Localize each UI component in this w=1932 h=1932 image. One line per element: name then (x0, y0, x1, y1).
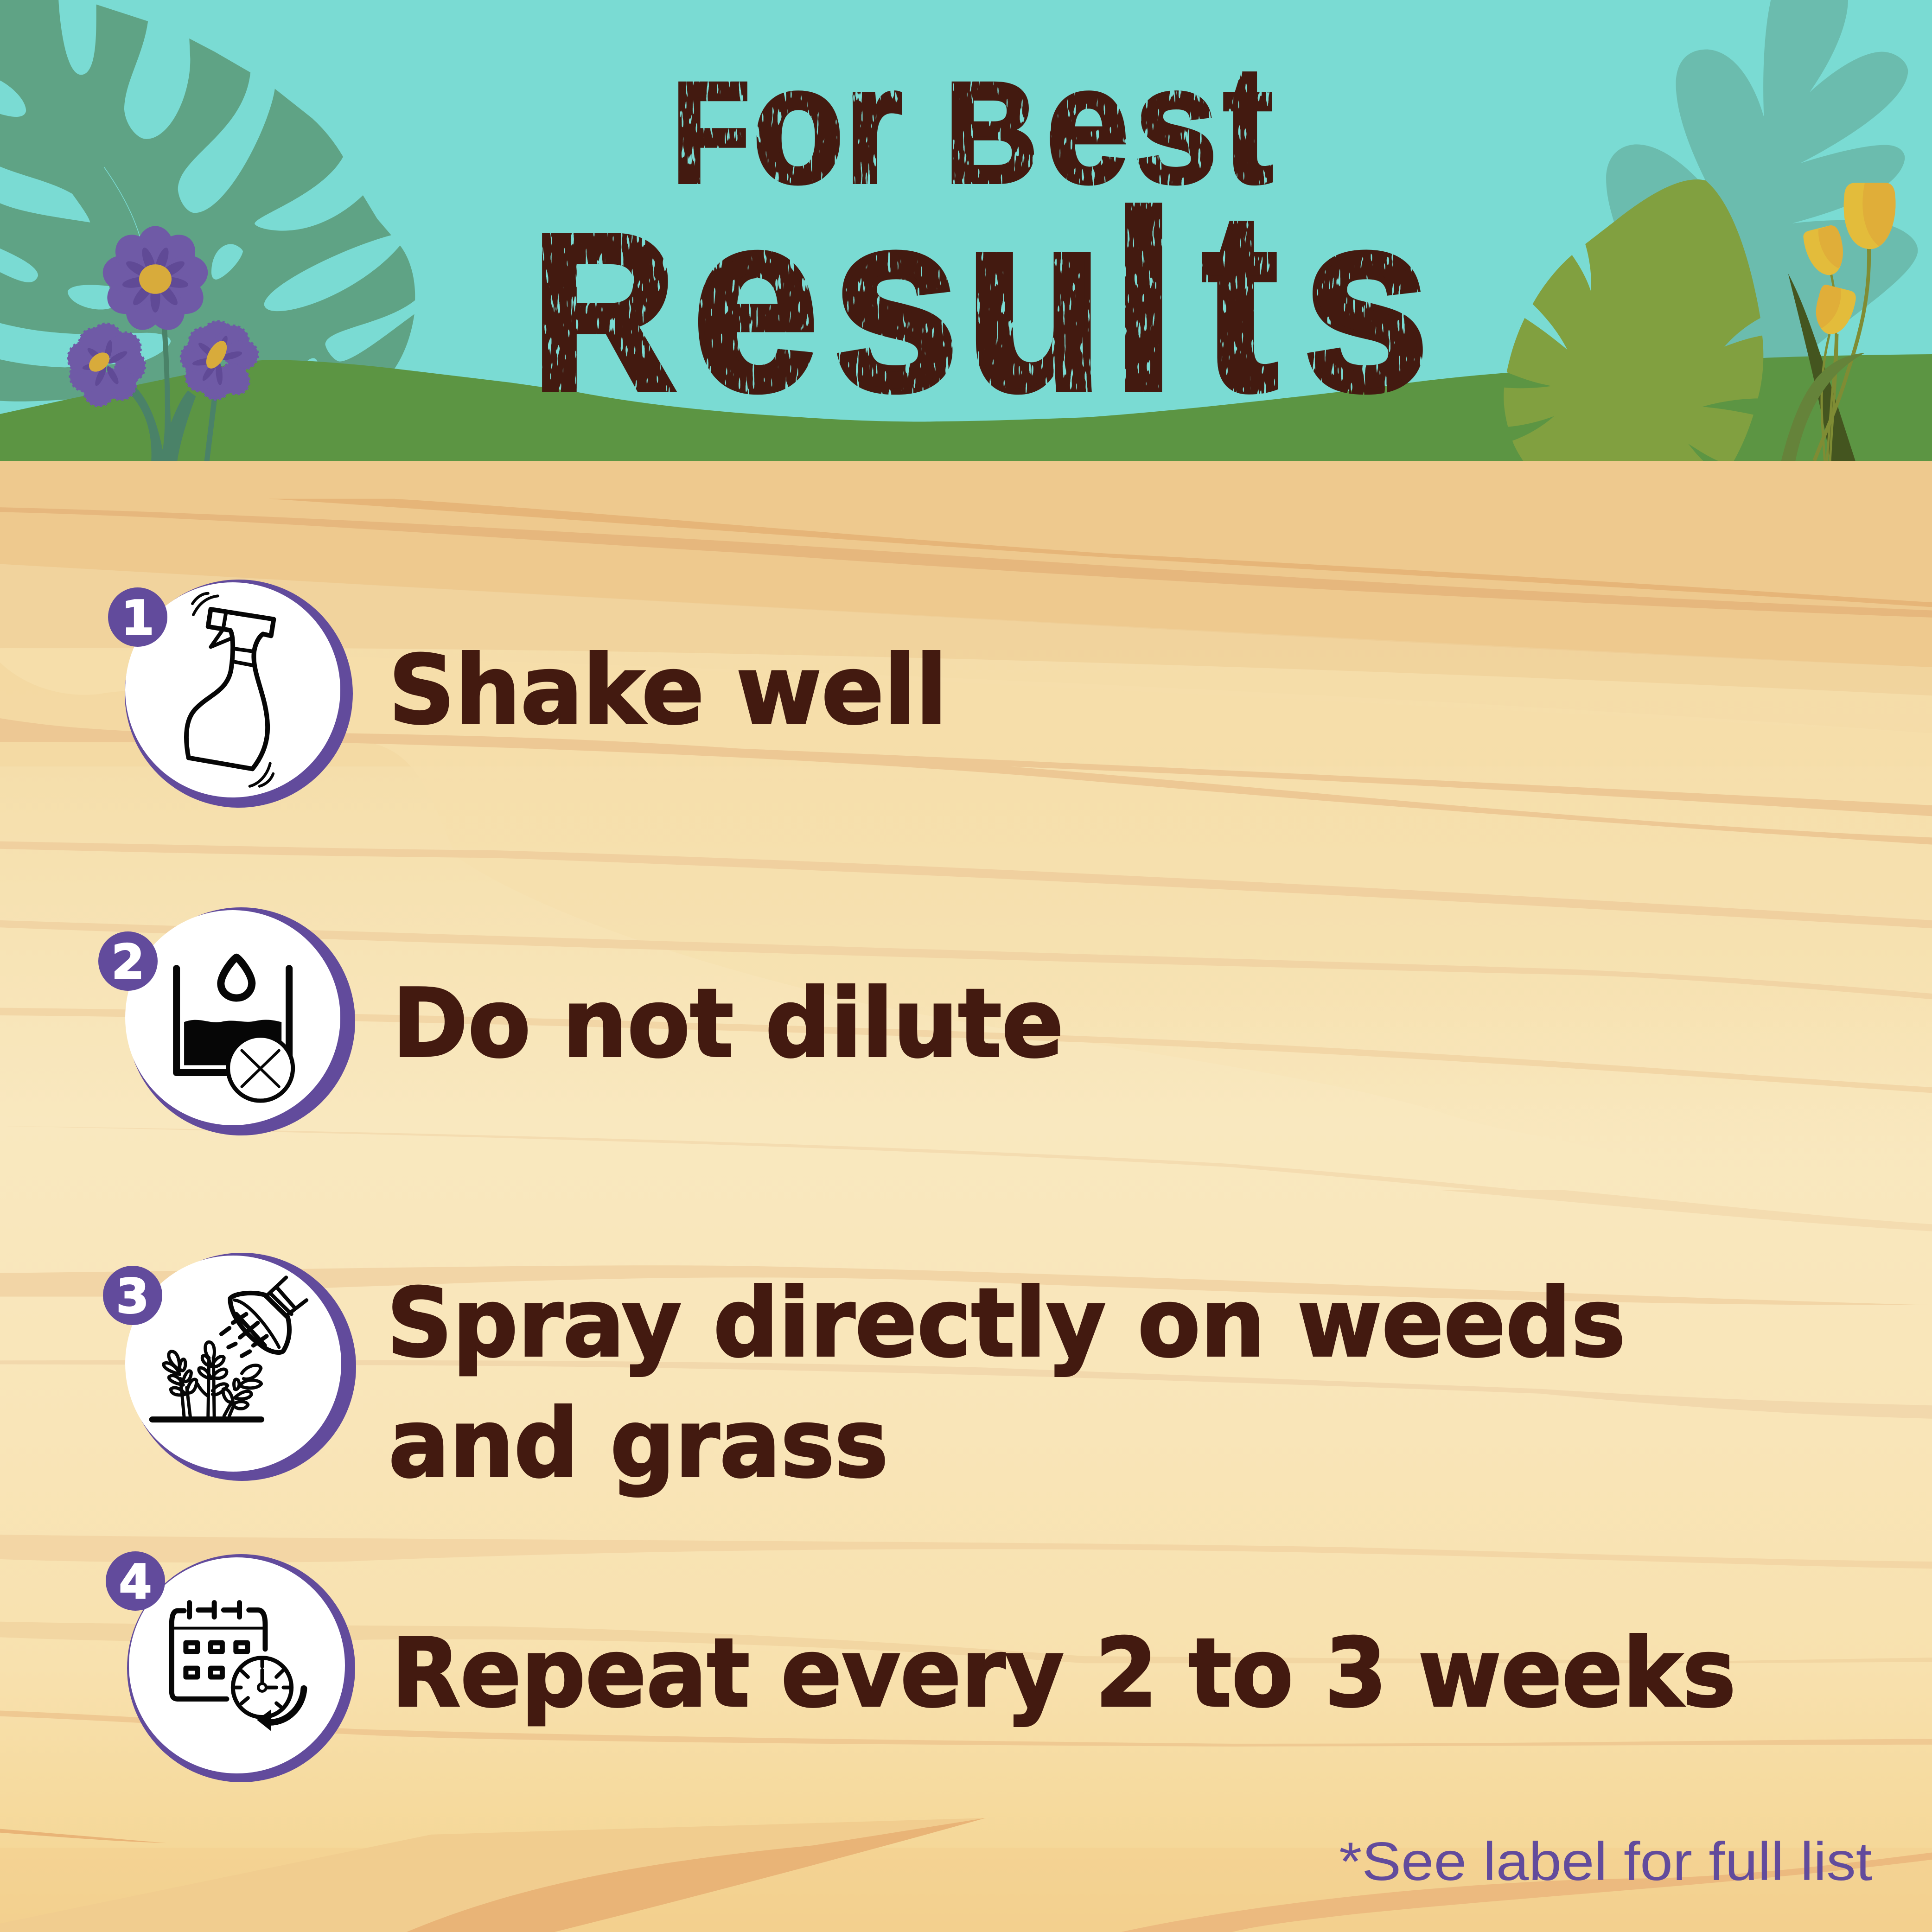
tulips and grass (1781, 183, 1895, 461)
monstera leaf left (0, 0, 415, 420)
step 3 (103, 1253, 1626, 1499)
text: spray directly: Spray directly on weeds (387, 1269, 1626, 1378)
badge: number 2: 2 (112, 935, 144, 990)
title: s (1303, 160, 1429, 443)
purple flower lower left (64, 323, 147, 410)
left-edge leaf notches (0, 81, 318, 414)
background bush right (1606, 0, 1918, 384)
purple flower large (100, 226, 211, 335)
title: s (833, 160, 959, 443)
icon: spray on plants circle (125, 1253, 356, 1481)
green leaf right (1504, 179, 1763, 461)
tulip 2 (1803, 225, 1843, 275)
title: u (965, 160, 1103, 443)
badge: number 3 (103, 1266, 162, 1325)
title: l (1112, 160, 1175, 443)
icon: do not dilute circle (125, 907, 355, 1135)
tulip 3 (1817, 285, 1856, 334)
icon: calendar and clock circle (127, 1554, 355, 1782)
text: spray directly: and grass (389, 1389, 888, 1499)
badge: number 1 (108, 587, 167, 647)
text: repeat every: Repeat every 2 to 3 weeks (391, 1619, 1736, 1728)
icon: spray bottle circle (125, 580, 353, 808)
badge: number 2 (98, 931, 158, 991)
panel: wood background (0, 461, 1932, 1932)
badge: number 4 (106, 1551, 165, 1611)
title: R (532, 188, 676, 436)
purple flower lower right (179, 319, 260, 401)
badge: number 4: 4 (119, 1555, 152, 1610)
flower stems (125, 325, 217, 461)
step 2 (98, 907, 1064, 1135)
footnote: *See label for full list (1339, 1831, 1872, 1892)
text: spray directly (387, 1269, 1626, 1499)
text: do not dilute: Do not dilute (392, 969, 1064, 1079)
title: t (1202, 160, 1278, 443)
title: e (692, 160, 819, 443)
title: s (1134, 31, 1218, 218)
panel: sky header (0, 0, 1932, 461)
title: F (671, 52, 751, 213)
title: r (844, 31, 903, 218)
title: B (945, 52, 1038, 213)
badge: number 3: 3 (116, 1269, 149, 1324)
text: shake well: Shake well (389, 636, 947, 746)
tulip 1 (1844, 183, 1895, 249)
title: t (1223, 31, 1273, 218)
wood grain streaks (0, 499, 1932, 1201)
title (532, 31, 1429, 443)
step 1 (108, 580, 947, 808)
hill (0, 354, 1932, 461)
title: e (1046, 31, 1129, 218)
badge: number 1: 1 (121, 591, 154, 646)
title: o (752, 31, 844, 218)
step 4 (106, 1551, 1736, 1782)
